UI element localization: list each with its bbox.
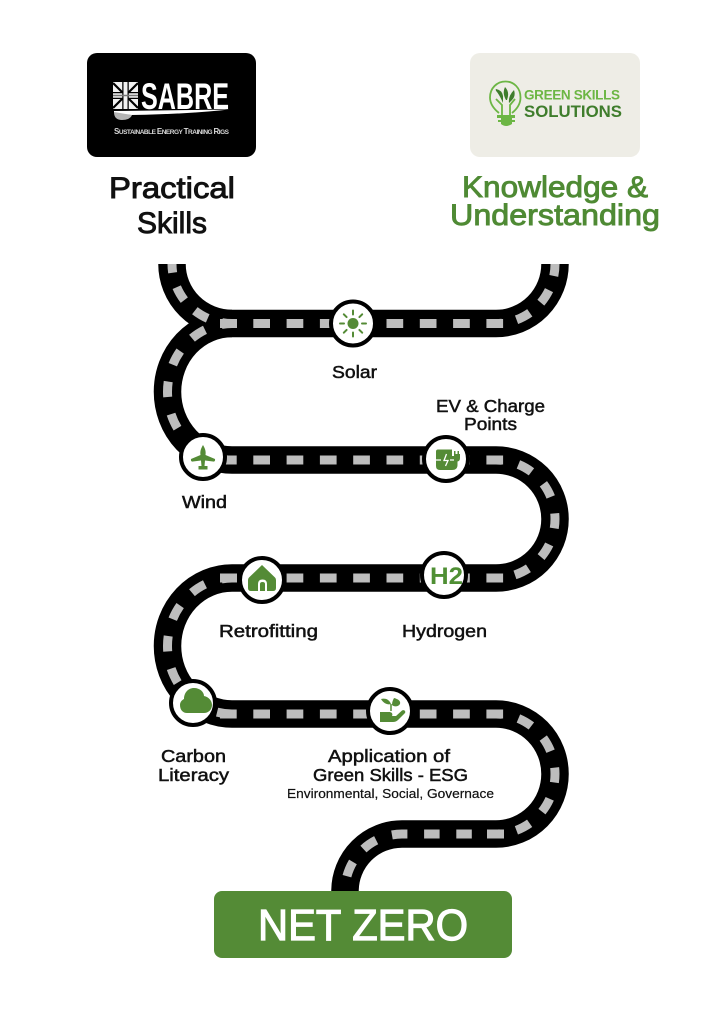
marker: EV and charge points: [424, 437, 468, 481]
SOLUTIONS text: SOLUTIONS: [524, 102, 622, 121]
icon: EV charger: [436, 450, 460, 470]
banner: Net Zero: [214, 891, 512, 958]
label: Hydrogen: Hydrogen: [402, 621, 487, 641]
icon: wind turbine: [191, 445, 215, 470]
label: Solar: Solar: [332, 362, 377, 382]
icon: union flag: [113, 82, 138, 109]
logo: Green Skills Solutions: [470, 53, 640, 157]
heading: Practical Skills: Practical: [109, 172, 235, 205]
label: Application of Green Skills - ESG: Application of: [328, 746, 450, 766]
road: [168, 264, 555, 891]
icon: hand holding plant: [380, 698, 405, 722]
logo: SABRE: [87, 53, 256, 157]
label: Application of Green Skills - ESG: Green Skills - ESG: [313, 765, 468, 785]
icon: sun: [340, 310, 366, 336]
banner: Net Zero: NET ZERO: [258, 901, 468, 950]
marker: application of green skills: [368, 689, 412, 733]
label: Retrofitting: Retrofitting: [219, 621, 318, 641]
marker: hydrogen: [422, 553, 466, 597]
label: EV & Charge Points: Points: [464, 414, 517, 434]
label: Application of Green Skills - ESG: [287, 746, 494, 801]
GREEN SKILLS text: GREEN SKILLS: [524, 88, 620, 102]
SABRE wordmark: SABRE: [141, 76, 229, 117]
marker: carbon literacy: [171, 681, 215, 725]
marker: solar: [331, 302, 375, 346]
icon: sword: [114, 110, 229, 120]
icon: house: [248, 565, 276, 591]
label: EV & Charge Points: [436, 396, 545, 434]
marker: retrofitting: [240, 558, 284, 602]
label: Carbon Literacy: [158, 746, 229, 785]
road lane markings: [168, 264, 555, 891]
sub-label: ESG meaning: Environmental, Social, Governace: [287, 787, 494, 801]
heading: Practical Skills: [109, 172, 235, 240]
icon: cloud: [180, 688, 212, 713]
marker: wind: [181, 435, 225, 479]
heading: Knowledge & Understanding: Knowledge &: [462, 171, 648, 204]
icon: H2: H2: [430, 563, 463, 590]
heading: Knowledge & Understanding: [450, 171, 660, 232]
label: EV & Charge Points: EV & Charge: [436, 396, 545, 416]
icon: lightbulb with tree: [490, 82, 520, 126]
heading: Knowledge & Understanding: Understanding: [450, 199, 660, 232]
label: Carbon Literacy: Carbon: [161, 746, 226, 766]
tagline: SUSTAINABLE ENERGY TRAINING RIGS: [114, 127, 230, 136]
heading: Practical Skills: Skills: [137, 207, 207, 240]
label: Carbon Literacy: Literacy: [158, 765, 229, 785]
label: Wind: Wind: [182, 492, 227, 512]
